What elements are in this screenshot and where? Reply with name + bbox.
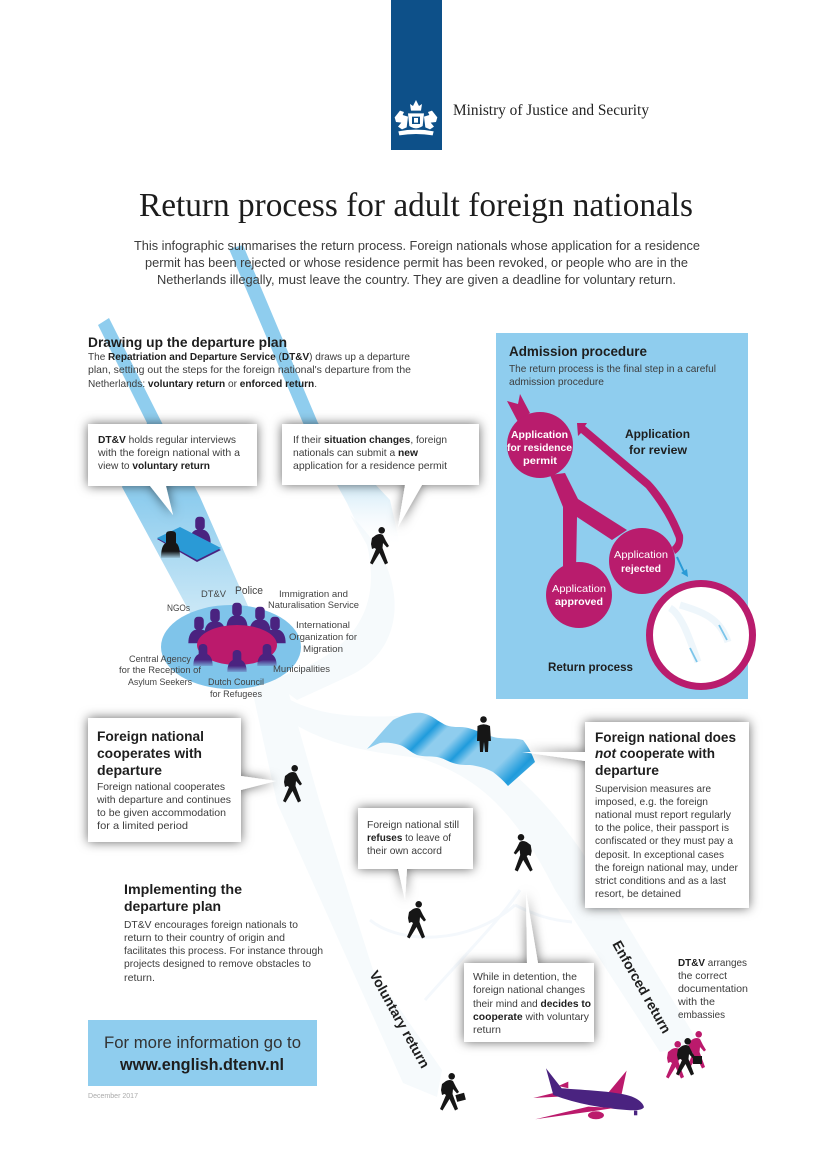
- participant labels: [119, 585, 359, 700]
- participant labels: Naturalisation Service: [268, 600, 359, 611]
- body text: DT&V encourages foreign nationals to: [124, 919, 298, 931]
- icon: walking person with briefcase: [440, 1073, 466, 1110]
- text block: for a limited period: [97, 820, 188, 832]
- callout: situation changes: If their situation changes, foreign: [293, 434, 447, 446]
- heading: departure: [97, 762, 162, 778]
- circle label: application approved: approved: [555, 596, 603, 608]
- callout: changes mind in detention: cooperate with voluntary: [473, 1011, 590, 1023]
- text block: [88, 351, 411, 390]
- callout: foreign national does not cooperate: [522, 722, 749, 908]
- heading: departure plan: [124, 898, 221, 914]
- label: enforced return: Enforced return: [609, 938, 675, 1036]
- wave: supervision ribbon: [367, 713, 535, 786]
- callout: still refuses: [358, 808, 473, 900]
- date: December 2017: [88, 1091, 138, 1100]
- text block: deposit. In exceptional cases: [595, 849, 724, 861]
- circle label: application approved: [552, 583, 606, 608]
- circle label: application approved: Application: [552, 583, 606, 595]
- text block: DT&V arranges documentation: [677, 957, 748, 1021]
- route: voluntary return pale stream: [250, 680, 442, 1097]
- callout: regular interviews: [88, 424, 257, 515]
- circle label: application for residence permit: for residence: [507, 442, 572, 454]
- heading: Admission procedure: [509, 343, 647, 359]
- callout: foreign national cooperates: [88, 718, 276, 842]
- text block: confiscated or they must pay a: [595, 835, 733, 847]
- icon: airplane: [533, 1068, 644, 1119]
- callout: regular interviews: DT&V holds regular interviews: [98, 434, 236, 446]
- heading: Foreign national: [97, 728, 204, 744]
- circle label: application rejected: Application: [614, 549, 668, 561]
- participant labels: DT&V: [201, 589, 227, 600]
- icon: royal coat of arms: [395, 100, 437, 135]
- participant labels: Organization for: [289, 632, 357, 643]
- intro text: Netherlands illegally, must leave the country. They are given a deadline for voluntary return.: [157, 273, 676, 287]
- text block: national must report regularly: [595, 809, 732, 821]
- text block: strict conditions and as a last: [595, 875, 726, 887]
- participant labels: NGOs: [167, 603, 190, 614]
- participant labels: International: [296, 620, 350, 631]
- circle: application approved: [546, 562, 612, 628]
- icon: walking person, refusing: [407, 901, 426, 938]
- text block: admission procedure: [509, 376, 604, 388]
- header: logo band: [391, 0, 442, 150]
- text block: DT&V arranges documentation: with the: [677, 996, 715, 1008]
- section: drawing up the departure plan: [88, 334, 411, 390]
- circle label: application for residence permit: permit: [523, 455, 558, 467]
- body text: return to their country of origin and: [124, 932, 285, 944]
- icon: walking person, cooperating: [283, 765, 302, 802]
- label: return process: Return process: [548, 660, 633, 674]
- label: application for review: for review: [629, 443, 688, 457]
- icon: walking person, new application: [370, 527, 389, 564]
- text block: to be given accommodation: [97, 807, 226, 819]
- text block: [96, 781, 231, 832]
- info box: more information: For more information go to: [104, 1034, 301, 1052]
- icon: person escorted by two officers: [666, 1031, 706, 1078]
- heading: departure: [595, 762, 659, 778]
- text block: imposed, e.g. the foreign: [595, 796, 708, 808]
- callout: still refuses: Foreign national still: [367, 819, 459, 831]
- intro text: permit has been rejected or whose residence permit has been revoked, or people who are in the: [145, 256, 688, 270]
- heading: [124, 881, 242, 914]
- participant labels: Migration: [303, 644, 343, 655]
- route: enforced return pale stream: [255, 680, 700, 1052]
- info box: more information: [88, 1020, 317, 1086]
- circle: application for residence permit: [507, 412, 573, 478]
- callout: regular interviews: with the foreign national with a: [97, 447, 240, 459]
- arrow: application for review: [577, 423, 683, 554]
- icon: standing person on ribbon: [477, 716, 491, 752]
- callout: changes mind in detention: foreign national changes: [473, 984, 585, 996]
- text block: The return process is the final step in a careful: [509, 363, 716, 375]
- participant labels: for the Reception of: [119, 665, 201, 676]
- intro text: [134, 239, 700, 287]
- callout: still refuses: their own accord: [367, 845, 442, 857]
- label: application for review: Application: [625, 427, 690, 441]
- arrow: rejected to return process: [677, 557, 684, 572]
- text block: to the police, their passport is: [595, 822, 729, 834]
- participant labels: for Refugees: [210, 689, 262, 700]
- heading: Foreign national does: [595, 729, 736, 745]
- circle: application rejected: [609, 528, 675, 594]
- title: Return process for adult foreign nationals: [139, 187, 693, 224]
- participant labels: Dutch Council: [208, 677, 264, 688]
- flow diagram shapes: [507, 394, 752, 686]
- participant labels: Central Agency: [129, 654, 191, 665]
- text block: DT&V arranges documentation: the correct: [678, 970, 727, 982]
- heading: Implementing the: [124, 881, 242, 897]
- callout: situation changes: application for a residence permit: [293, 460, 447, 472]
- info box: more information: www.english.dtenv.nl: [119, 1056, 284, 1074]
- arrow: branches to approved and rejected: [550, 473, 627, 570]
- route: stream to departure plan meeting: [98, 318, 255, 622]
- text block: Foreign national cooperates: [97, 781, 225, 793]
- callout: changes mind in detention: [464, 892, 594, 1042]
- icon: walking person, in detention: [514, 834, 533, 872]
- arrow: into application: [507, 394, 530, 422]
- body text: return.: [124, 972, 155, 984]
- people in front of table: [193, 644, 277, 672]
- inset: mini return routes: [670, 605, 728, 662]
- heading: [595, 729, 736, 778]
- text block: [595, 783, 738, 900]
- callout: still refuses: refuses to leave of: [367, 832, 451, 844]
- heading: cooperates with: [97, 745, 202, 761]
- text block: Supervision measures are: [595, 783, 711, 795]
- route: re-application pale loop: [270, 515, 395, 700]
- circle label: application rejected: rejected: [621, 563, 661, 575]
- callout: changes mind in detention: return: [473, 1024, 501, 1036]
- callout: changes mind in detention: their mind and decides to: [473, 998, 591, 1010]
- circle label: application rejected: [614, 549, 668, 575]
- text block: [509, 363, 716, 388]
- text block: plan, setting out the steps for the foreign national's departure from the: [88, 364, 411, 376]
- route: stream to new application: [229, 245, 400, 545]
- label: voluntary return: Voluntary return: [366, 968, 433, 1071]
- body text: projects designed to remove obstacles to: [124, 958, 311, 970]
- callout: situation changes: nationals can submit a new: [293, 447, 419, 459]
- heading: not cooperate with: [595, 745, 715, 761]
- circle label: application for residence permit: Application: [511, 429, 568, 441]
- heading: [97, 728, 204, 778]
- participant labels: Immigration and: [279, 589, 348, 600]
- table platform: [161, 605, 301, 689]
- text block: the foreign national may, under: [595, 862, 738, 874]
- heading: Drawing up the departure plan: [88, 334, 287, 350]
- table top: [197, 625, 277, 665]
- panel: admission procedure: [496, 333, 752, 699]
- participant labels: Police: [235, 585, 263, 597]
- round table meeting: [119, 585, 359, 700]
- circle label: application for residence permit: [507, 429, 572, 467]
- participant labels: Asylum Seekers: [128, 677, 192, 688]
- text block: The Repatriation and Departure Service (DT&V) draws up a departure: [88, 351, 410, 363]
- icon: interview table with two people: [157, 517, 221, 562]
- text block: with departure and continues: [96, 794, 231, 806]
- people behind table: [188, 603, 286, 643]
- callout: regular interviews: view to voluntary return: [98, 460, 210, 472]
- route: thin pale links: [370, 890, 572, 1000]
- header: ministry name: Ministry of Justice and Security: [453, 102, 649, 119]
- text block: resort, be detained: [595, 888, 681, 900]
- callout: situation changes: [282, 424, 479, 527]
- body text: facilitates this process. For instance through: [124, 945, 323, 957]
- text block: implementing the departure plan: [124, 881, 323, 984]
- text block: DT&V arranges documentation: DT&V arranges: [678, 957, 747, 969]
- text block: DT&V arranges documentation: embassies: [678, 1009, 725, 1021]
- circle: return process inset: [650, 584, 752, 686]
- participant labels: Municipalities: [273, 664, 330, 675]
- body text: [124, 919, 323, 984]
- callout: changes mind in detention: While in detention, the: [473, 971, 577, 983]
- text block: Netherlands: voluntary return or enforced return.: [88, 378, 317, 390]
- intro text: This infographic summarises the return process. Foreign nationals whose application for a residence: [134, 239, 700, 253]
- text block: DT&V arranges documentation: documentation: [678, 983, 748, 995]
- label: application for review: [625, 427, 690, 457]
